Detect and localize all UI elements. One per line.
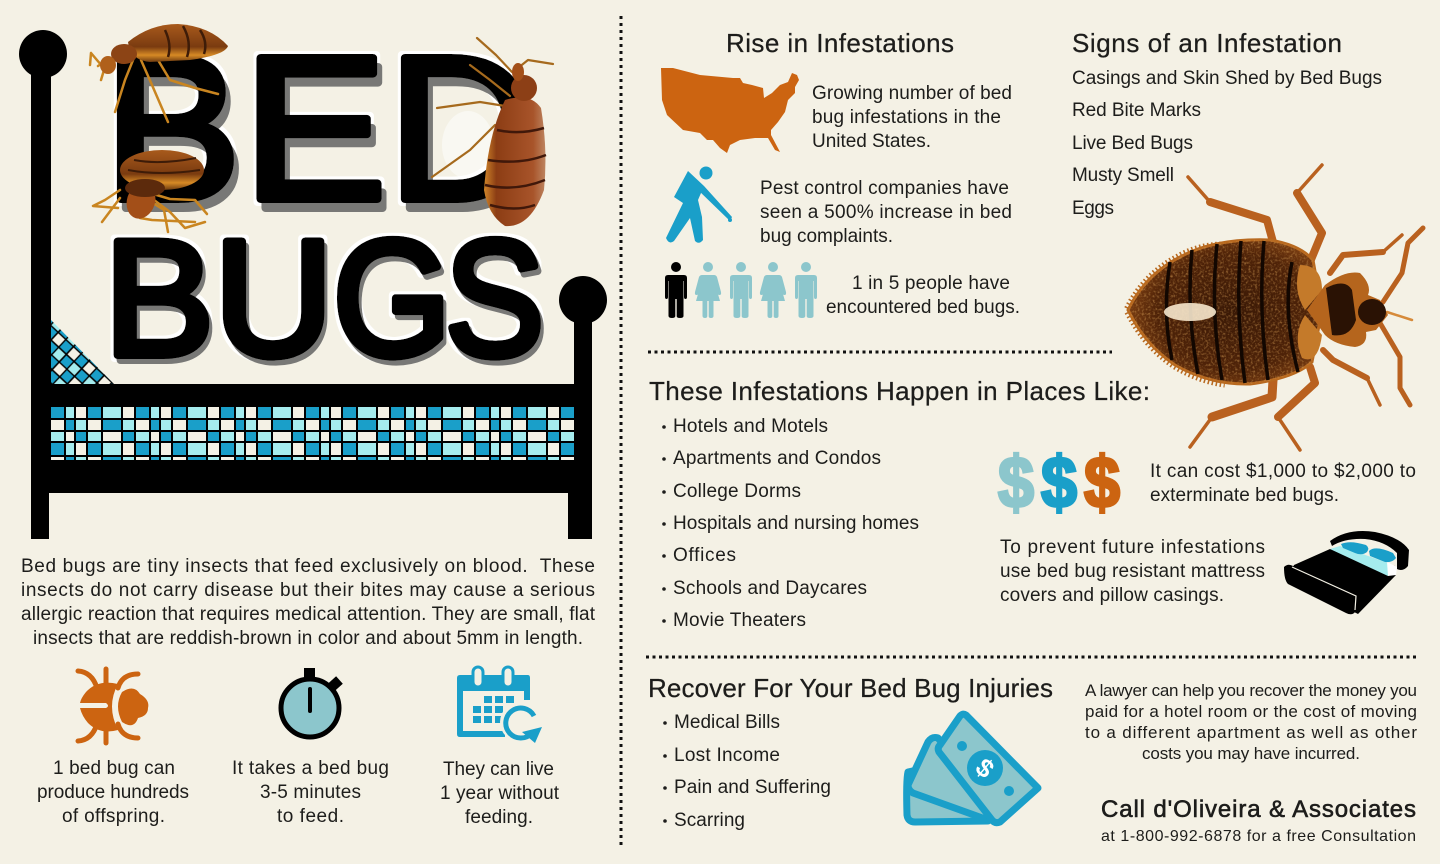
list: damages: Pain and Suffering: [674, 777, 831, 798]
text: one in five: 1 in 5 people have: [852, 273, 1010, 294]
heading: places: These Infestations Happen in Places Like:: [649, 376, 1150, 406]
icon: orange bug: [78, 669, 148, 743]
list: signs: Red Bite Marks: [1072, 100, 1201, 121]
text: lawyer: paid for a hotel room or the cost of moving: [1085, 702, 1417, 721]
pale patch behind letter D: [442, 111, 494, 179]
list: places: Hotels and Motels: [673, 416, 828, 437]
list: places: Movie Theaters: [673, 610, 806, 631]
list: places: Schools and Daycares: [673, 578, 867, 599]
vertical dotted divider: [620, 16, 622, 848]
text: pest control complaints: [760, 178, 1012, 247]
text: lawyer: costs you may have incurred.: [1142, 744, 1360, 763]
list: signs: [1072, 68, 1382, 219]
abdomen highlight: [1164, 303, 1216, 321]
icon: US map: [661, 68, 799, 153]
intro paragraph: allergic reaction that requires medical attention. They are small, flat: [21, 604, 596, 625]
caption: feeding time: to feed.: [277, 806, 344, 827]
abdomen hairs: [1128, 246, 1225, 383]
title: BUGS: S: [445, 207, 544, 391]
text: lawyer: [1085, 681, 1417, 763]
illustration: large bed bug: [1128, 165, 1423, 450]
call to action: Call d'Oliveira & Associates: [1101, 796, 1416, 823]
list: signs: Eggs: [1072, 198, 1114, 219]
icon: pest control worker: [666, 166, 732, 243]
list: signs: Live Bed Bugs: [1072, 133, 1193, 154]
list: places: Hospitals and nursing homes: [673, 513, 919, 534]
text: one in five: encountered bed bugs.: [826, 297, 1020, 318]
title: BED: D: [388, 14, 536, 243]
call to action: [1101, 796, 1416, 845]
pillow mesh triangle: [51, 320, 115, 384]
list: signs: Musty Smell: [1072, 165, 1174, 186]
title: BED: [104, 14, 536, 243]
list: places: Apartments and Condos: [673, 448, 881, 469]
abdomen texture: [1128, 240, 1322, 384]
text: one in five: [826, 273, 1020, 318]
caption: offspring: of offspring.: [62, 806, 165, 827]
illustration: bed frame: [19, 30, 607, 539]
text: cost: [1150, 461, 1416, 506]
right bedpost with knob: [568, 318, 592, 539]
text: pest control complaints: bug complaints.: [760, 226, 893, 247]
caption: survival: [440, 759, 560, 828]
caption: survival: feeding.: [465, 807, 533, 828]
caption: offspring: 1 bed bug can: [53, 758, 175, 779]
legs: [1188, 165, 1423, 450]
title: BED: B: [104, 14, 241, 243]
bug photo: letter D: [432, 38, 553, 226]
icon: money: [907, 714, 1038, 823]
icon: dollar signs: $: [1084, 442, 1120, 523]
abdomen segments: [1166, 241, 1298, 383]
caption: survival: They can live: [443, 759, 554, 780]
text: prevention: use bed bug resistant mattress: [1000, 561, 1265, 582]
icon: bed: [1284, 531, 1409, 614]
title: BED: E: [243, 14, 387, 243]
call to action: at 1-800-992-6878 for a free Consultation: [1101, 828, 1416, 845]
text: growing infestations: Growing number of bed: [812, 83, 1012, 104]
text: growing infestations: bug infestations in the: [812, 107, 1001, 128]
text: growing infestations: [812, 83, 1012, 152]
intro paragraph: [21, 556, 596, 649]
intro paragraph: insects do not carry disease but their bites may cause a serious: [21, 580, 595, 601]
text: lawyer: to a different apartment as well as other: [1085, 723, 1417, 742]
horizontal dotted divider: [646, 656, 1418, 658]
title: BUGS: B: [104, 206, 214, 390]
text: prevention: To prevent future infestations: [1000, 537, 1265, 558]
list: places: Offices: [673, 545, 736, 566]
horizontal dotted divider: [648, 350, 1112, 354]
icon: stopwatch: [281, 668, 343, 737]
intro paragraph: insects that are reddish-brown in color and about 5mm in length.: [33, 628, 583, 649]
text: lawyer: A lawyer can help you recover the money you: [1085, 681, 1417, 700]
bug photo: top of letter B: [90, 24, 228, 122]
title: BUGS: U: [214, 206, 333, 390]
abdomen: [1128, 240, 1322, 384]
heading: rise in infestations: Rise in Infestations: [726, 28, 954, 58]
text: cost: exterminate bed bugs.: [1150, 485, 1339, 506]
list: damages: Lost Income: [674, 745, 780, 766]
text: prevention: [1000, 537, 1265, 606]
text: growing infestations: United States.: [812, 131, 931, 152]
mattress checker pattern: [51, 407, 574, 460]
text: pest control complaints: Pest control companies have: [760, 178, 1009, 199]
list: damages: [663, 712, 831, 831]
thorax shoulders: [1297, 265, 1322, 359]
heading: recover: Recover For Your Bed Bug Injuries: [648, 673, 1053, 703]
caption: offspring: produce hundreds: [37, 782, 189, 803]
left bedpost with knob: [31, 70, 51, 539]
list: damages: Medical Bills: [674, 712, 780, 733]
icon: one in five people: [665, 262, 817, 318]
caption: feeding time: 3-5 minutes: [260, 782, 361, 803]
list: places: College Dorms: [673, 481, 801, 502]
icon: dollar signs: $: [1041, 442, 1077, 523]
icon: dollar signs: $: [998, 442, 1034, 523]
caption: feeding time: It takes a bed bug: [232, 758, 389, 779]
text: pest control complaints: seen a 500% increase in bed: [760, 202, 1012, 223]
title: BUGS: G: [333, 205, 451, 390]
icon: calendar: [457, 667, 542, 743]
list: places: [662, 416, 919, 631]
text: prevention: covers and pillow casings.: [1000, 585, 1224, 606]
icon: dollar signs: [998, 442, 1120, 523]
text: cost: It can cost $1,000 to $2,000 to: [1150, 461, 1416, 482]
bug photo: lower letter B: [93, 150, 207, 232]
caption: offspring: [37, 758, 189, 827]
title: BUGS: [104, 205, 544, 391]
caption: survival: 1 year without: [440, 783, 560, 804]
caption: feeding time: [232, 758, 389, 827]
list: signs: Casings and Skin Shed by Bed Bugs: [1072, 68, 1382, 89]
list: damages: Scarring: [674, 810, 745, 831]
intro paragraph: Bed bugs are tiny insects that feed exclusively on blood. These: [21, 556, 595, 577]
thorax and head: [1307, 272, 1388, 347]
icon: money: $: [970, 752, 1001, 784]
heading: signs of an infestation: Signs of an Infestation: [1072, 28, 1342, 58]
mattress rails: [31, 384, 592, 493]
